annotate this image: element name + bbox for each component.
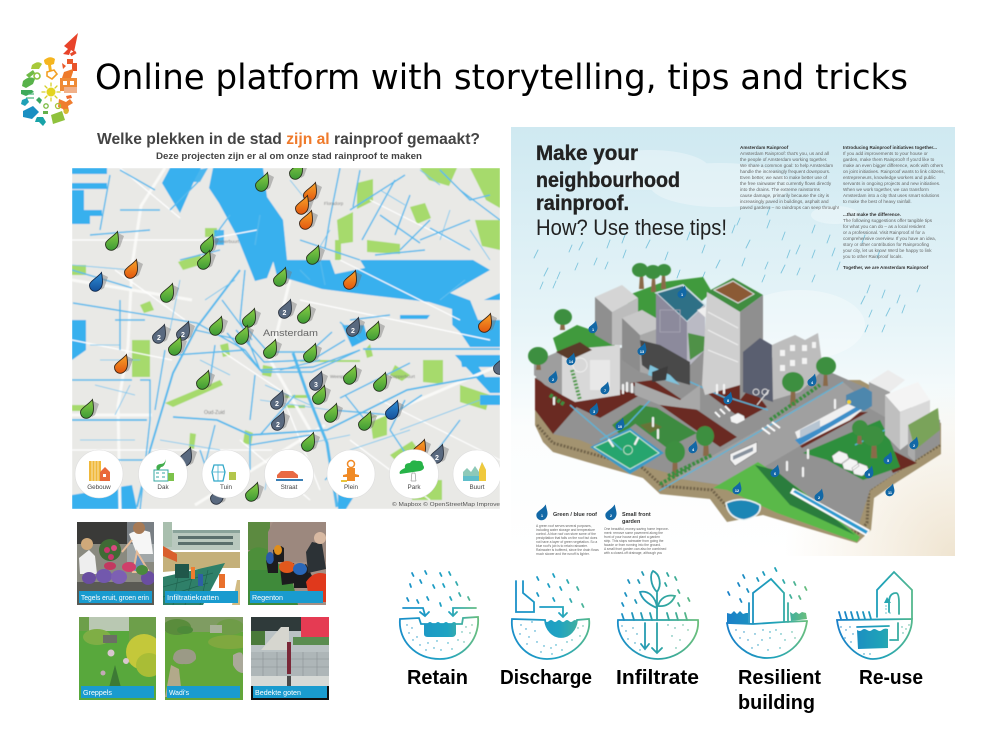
place names on map: Haarlemmerbuurt [204,239,240,244]
photo: Greppels [79,617,156,700]
legend: small front garden: One beautiful, money-saving home improve- [604,527,669,531]
attribution: © Mapbox © OpenStreetMap Improve [392,501,500,508]
label: Re-use: Re-use [859,667,923,689]
icon: Plein [341,460,359,482]
button labels: Park [408,484,421,491]
category buttons [75,450,501,498]
brick pavements [535,372,917,473]
caption: Tegels eruit, groen erin [81,595,149,602]
green hills [553,277,712,360]
legend: green / blue roof: Green / blue roof [553,512,597,518]
numbered map markers: 9 [868,473,870,477]
intro text column 1: the free rainwater that currently flows directly [740,181,832,186]
intro text column 2: Introducing Rainproof initiatives together... [843,145,937,150]
intro text column 1: increasingly paved in buildings, asphalt and [740,199,829,204]
intro text column 2: Amsterdam into a city that uses smart solutions [843,193,940,198]
photo: Tegels eruit, groen erin [77,522,154,605]
heading: Make your [536,142,638,165]
intro text column 1: Even better, we want to make better use of [740,175,828,180]
intro text column 2: you to other Rainproof locals. [843,254,903,259]
intro text column 2: If you add improvements to your house or [843,151,928,156]
map pins: 2 [435,455,439,462]
intro text column 1: the people of Amsterdam working together. [740,157,827,162]
legend: green / blue roof: A green roof serves several purposes, [536,524,592,528]
map pins: 2 [351,328,355,335]
right lawn [803,420,900,480]
button labels: Tuin [220,484,233,491]
icon: Gebouw [89,461,110,481]
tram and bus stop [795,387,872,445]
intro text column 2: Together, we are Amsterdam Rainproof [843,265,929,270]
numbered map markers: 2 [552,378,554,382]
intro text column 2: or a professional. Visit Rainproof.nl for a [843,230,925,235]
numbered map markers: 11 [888,491,892,495]
label: Resilient building: Resilient [738,667,821,689]
label: Resilient building: building [738,692,815,714]
icon: retain [400,571,478,659]
legend: small front garden [604,504,669,555]
intro text column 2 [843,145,945,270]
map base: land, water and parks [72,168,500,510]
numbered map markers: 6 [774,472,776,476]
place names on map: Weesperzijde [330,374,358,379]
caption: Wadi's [169,690,189,697]
soil [535,380,941,543]
numbered map markers: 1 [681,293,683,297]
button labels: Dak [157,484,169,491]
numbered map markers: 2 [818,496,820,500]
legend: small front garden: front of your house and plant a garden [604,535,660,539]
icon: Buurt [463,462,486,481]
numbered map markers: 13 [640,350,644,354]
map pins: 2 [275,401,279,408]
numbered map markers: 8 [727,399,729,403]
map pins: 2 [157,335,161,342]
building: right block [869,370,940,462]
legend: small front garden: ment: remove some pavement along the [604,531,663,535]
bus [730,442,757,466]
map pins: 2 [283,310,287,317]
label: Retain: Retain [407,667,468,689]
intro text column 1: cause damage, primarily because the city is [740,193,830,198]
clouds [590,150,858,302]
parked vehicles [730,413,869,476]
water lines [570,375,895,491]
hedges [550,385,820,484]
map pins: 2 [276,422,280,429]
heading: neighbourhood [536,169,680,192]
intro text column 1: handle the increasingly frequent downpours. [740,169,830,174]
photo: Regenton [248,522,326,605]
legend: small front garden: A small front garden can also be combined [604,547,666,551]
building: grey block A [594,285,657,374]
building: brown roof block [702,278,763,400]
intro text column 2: story or other contribution for Rainproofing [843,242,929,247]
isometric neighbourhood illustration [528,263,941,543]
intro text column 1: into the drains. The extreme rainstorms [740,187,821,192]
button labels: Buurt [469,484,485,491]
swale with water channel [713,462,870,542]
intro text column 1: Amsterdam Rainproof: that's you, us and all [740,151,829,156]
numbered map markers: 2 [913,444,915,448]
intro text column 2: on joint initiatives. Rainproof wants to link citizens, [843,169,945,174]
heading: How? Use these tips! [536,215,727,240]
label: Resilient building [738,667,821,714]
legend: green / blue roof: blue roof's job is to retain rainwater. [536,544,588,548]
legend: small front garden: with a closed-off drainage, although you [604,551,662,555]
numbered map markers: 14 [569,360,574,364]
sports court [590,428,664,474]
building: blue roof block [656,285,705,368]
map subheading: Deze projecten zijn er al om onze stad rainproof te maken [156,151,422,162]
panel: Make your neighbourhood rainproof poster [511,127,955,556]
place names on map: Oud-Zuid [204,410,225,416]
label: Infiltrate: Infiltrate [616,667,699,689]
courtyard with terraces [634,306,706,410]
legend: green / blue roof: control. A blue roof can store some of the [536,532,596,536]
rain [534,207,920,332]
numbered map markers: 10 [618,425,622,429]
caption: Bedekte goten [255,690,301,697]
intro text column 2: When we work together, we can transform [843,187,929,192]
map pins: 2 [181,332,185,339]
label: Discharge: Discharge [500,667,592,689]
building: left block [534,342,620,402]
intro text column 1 [740,145,839,210]
ground deck [535,340,940,530]
legend: small front garden: strip. This stops rainwater from going the [604,539,664,543]
green field [612,405,697,448]
people [554,383,835,476]
legend: green / blue roof: 1 [541,513,544,518]
caption: Infiltratiekratten [167,595,219,602]
legend: green / blue roof [536,504,599,556]
place names on map [204,201,416,416]
intro text column 2: for what you can do – as a local resident [843,224,926,229]
legend: green / blue roof: not have a layer of green vegetation. So a [536,540,597,544]
intro text column 2: servants in ongoing projects and new initiatives. [843,181,940,186]
intro text column 2: to make the best of heavy rainfall. [843,199,912,204]
numbered map markers: 4 [692,448,695,452]
map pins [81,160,512,504]
intro text column 2: your city, let us know! We'd be happy to link [843,248,932,253]
legend: green / blue roof: precipitation that falls on the roof but does [536,536,598,540]
intro text column 2: ...that make the difference. [843,212,901,217]
numbered map markers: 5 [887,459,889,463]
building: white gables [772,333,823,400]
intro text column 2: garden, make them Rainproof! If you'd like to [843,157,935,162]
logo: multicoloured droplet made of icons [21,33,78,126]
photo: Wadi's [165,617,243,700]
caption: Greppels [83,690,113,697]
icon: infiltrate [618,571,698,659]
button labels: Gebouw [87,484,111,491]
intro text column 2: make an even bigger difference, work with others [843,163,944,168]
numbered map markers: 4 [811,381,814,385]
legend: small front garden: garden [622,519,641,525]
icon: Park [400,460,424,481]
map pins: 3 [314,382,318,389]
icon: Tuin [212,465,236,481]
pond [726,499,760,520]
legend: green / blue roof: Rainwater is buffered, since the drain flows [536,548,599,552]
heading: rainproof. [536,192,629,215]
legend: green / blue roof: including water storage and temperature [536,528,595,532]
intro text column 2: entrepreneurs, knowledge workers and public [843,175,936,180]
crosswalks [715,406,780,434]
caption: Regenton [252,595,283,602]
main road [674,382,854,484]
intro text column 2: The following suggestions offer tangible tips [843,218,933,223]
button labels: Straat [281,484,298,491]
button labels: Plein [344,484,358,491]
legend: small front garden: 2 [610,513,613,518]
legend: small front garden: facade or from running into the ground. [604,543,661,547]
map heading: Welke plekken in de stad zijn al rainproof gemaakt? [97,131,480,148]
numbered map markers: 1 [592,328,594,332]
button labels [88,484,484,489]
photo: Bedekte goten [251,617,329,700]
intro text column 1: We share a common goal: to help Amsterdam [740,163,833,168]
title: Online platform with storytelling, tips and tricks [95,58,908,98]
numbered map markers: 3 [593,410,595,414]
icon: Straat [276,471,303,481]
map of Amsterdam with project pins [72,160,512,510]
legend: small front garden: Small front [622,512,651,518]
numbered map markers [548,286,918,501]
numbered map markers: 12 [735,489,739,493]
intro text column 1: Amsterdam Rainproof [740,145,789,150]
icon: re-use [837,572,912,659]
icon: resilient building [727,568,807,658]
icon: Dak [154,459,174,481]
place names on map: Dapperbuurt [390,374,416,379]
intro text column 2: comprehensive overview. If you have an idea, [843,236,936,241]
place names on map: Floradorp [324,201,344,206]
numbered map markers: 7 [604,389,606,393]
icon: discharge [512,574,589,659]
building: dark townhouses [743,338,773,405]
label: Amsterdam: Amsterdam [263,328,318,339]
legend: green / blue roof: much slower and the runoff is lighter. [536,552,590,556]
intro text column 1: paved gardens – no raindrops can seep through! [740,205,839,210]
heading [536,142,727,240]
photo: Infiltratiekratten [163,522,240,605]
trees [528,263,884,477]
